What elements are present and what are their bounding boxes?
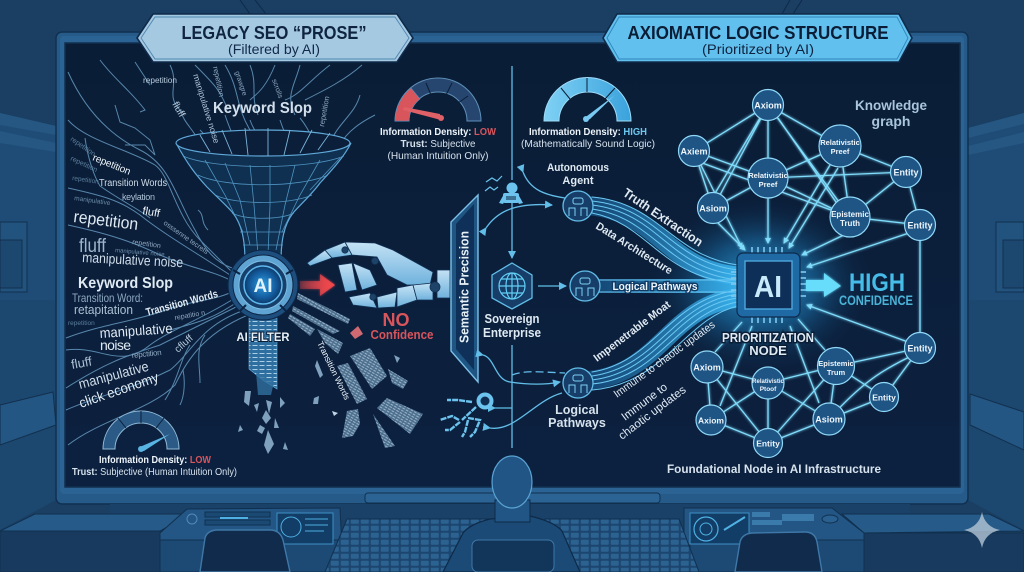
heading: legacy SEO prose <box>137 14 413 62</box>
rotated flow labels: Immune to chaotic updates <box>612 319 718 400</box>
node: entity lower right <box>904 332 936 364</box>
node: relativistic proof lower <box>752 367 785 399</box>
left word stream labels: repetition <box>91 153 132 178</box>
node: asiom bottom <box>813 403 845 435</box>
left word stream labels: noise <box>100 337 131 353</box>
label: autonomous agent: Agent <box>562 175 594 187</box>
graph nodes <box>678 90 936 458</box>
left word stream labels: manipulative <box>77 358 151 392</box>
node: relativistic preef upper: Preef <box>831 147 850 156</box>
node: epistemic truth upper <box>830 197 870 237</box>
shredded text strips <box>288 293 423 448</box>
node: entity small: Entity <box>872 392 896 402</box>
left word stream labels: click economy <box>77 369 160 411</box>
left word stream labels: fluff <box>70 354 93 372</box>
node: relativistic preef center <box>748 158 788 198</box>
node: axiom top: Axiom <box>754 100 782 110</box>
node: entity bottom <box>754 428 782 458</box>
gauge text: top low density <box>380 126 496 162</box>
heading: axiomatic logic structure: AXIOMATIC LOGIC STRUCTURE <box>628 23 888 43</box>
node: entity lower right: Entity <box>907 344 933 354</box>
node: logical pathways bottom <box>563 368 593 398</box>
knowledge graph edges bottom <box>707 319 920 443</box>
high-confidence arrow <box>806 273 841 297</box>
node: epistemic trum lower: Epistemic <box>818 359 854 368</box>
left word stream labels: repetition <box>69 155 98 174</box>
node: relativistic preef upper: Relativistic <box>820 138 860 147</box>
knowledge graph edges top <box>694 105 920 348</box>
flow bands into AI chip <box>592 197 738 390</box>
node: axiom bottom <box>696 405 726 435</box>
keyboard left <box>325 519 500 572</box>
node: relativistic preef upper <box>819 125 861 167</box>
funnel <box>176 128 351 262</box>
lower desk and consoles <box>0 504 1024 572</box>
left word stream labels: fluff <box>141 205 162 220</box>
label: logical pathways on band: Logical Pathways <box>612 281 698 293</box>
left word stream labels: Keyword Slop <box>78 275 173 292</box>
left word stream labels: manipulative noise <box>82 249 184 270</box>
label: high confidence: HIGH <box>849 269 905 297</box>
gauge text: top high density: Information Density: HIGH <box>529 126 647 138</box>
node: asiom bottom: Asiom <box>815 414 843 424</box>
AI filter core: AI <box>254 276 272 297</box>
gauge: top high density <box>544 78 631 122</box>
node: relativistic proof lower: Ptoof <box>760 386 777 393</box>
AI chip: AI <box>754 269 782 304</box>
left word stream labels: repetition <box>69 136 97 158</box>
left word stream labels: repetition <box>211 66 226 98</box>
gauge text: top low density: (Human Intuition Only) <box>388 150 488 162</box>
gauge: top low density <box>395 78 481 121</box>
left word stream labels: fluff <box>169 100 187 119</box>
left word stream labels: repetition <box>143 75 177 85</box>
icon: small agent robot top <box>485 176 523 204</box>
left word stream labels: manipulative <box>74 195 111 207</box>
label: logical pathways bottom: Logical <box>555 403 599 417</box>
left word stream labels: repetition <box>132 239 161 250</box>
red rejection arrow <box>300 274 335 296</box>
node: relativistic preef center: Relativistic <box>748 171 788 180</box>
left word stream labels: keylation <box>122 192 155 202</box>
node: epistemic truth upper: Epistemic <box>831 210 869 219</box>
rotated flow labels: Impenetrable Moat <box>592 299 673 364</box>
AI filter strip below funnel <box>238 318 288 454</box>
node: epistemic trum lower: Trum <box>827 368 845 377</box>
rotated flow labels: chaotic updates <box>617 384 689 442</box>
node: asiom upper: Asiom <box>699 204 727 214</box>
label: high confidence: CONFIDENCE <box>839 293 913 308</box>
gauge text: top low density: Trust: Subjective <box>400 138 476 150</box>
keyboard right <box>545 519 699 572</box>
left word stream labels: repetition <box>73 207 139 234</box>
heading: legacy SEO prose: LEGACY SEO “PROSE” <box>182 23 366 43</box>
node: asiom upper <box>698 192 728 224</box>
left panel: wires and word streams <box>66 60 375 445</box>
label: prioritization node: PRIORITIZATION <box>722 330 814 345</box>
gauge text: bottom-left low density: Trust: Subjective (Human Intuition Only) <box>72 466 237 478</box>
label: foundational node: Foundational Node in AI Infrastructure <box>667 462 881 476</box>
AI filter core <box>228 250 298 320</box>
label: knowledge graph: Knowledge <box>855 97 927 113</box>
gauge text: top low density: Information Density: LOW <box>380 126 496 138</box>
label: sovereign enterprise: Sovereign <box>484 311 540 326</box>
node: logical pathways middle <box>570 271 600 301</box>
node: epistemic trum lower <box>818 348 854 384</box>
central vertical flow <box>483 66 566 448</box>
left word stream labels: repetition <box>72 175 100 186</box>
left word stream labels: osssenne tecrets <box>162 220 210 256</box>
gauge: bottom-left low density <box>103 411 179 452</box>
console screen right <box>690 512 838 544</box>
label: logical pathways bottom: Pathways <box>548 416 606 430</box>
node: axiom lower: Axiom <box>693 362 721 372</box>
left word stream labels: Keyword Slop <box>213 100 312 117</box>
gauge text: bottom-left low density <box>72 454 237 478</box>
left word stream labels: Transition Word: <box>72 291 143 305</box>
star watermark <box>964 512 1000 548</box>
chair left <box>200 530 290 572</box>
NO confidence label <box>370 310 434 342</box>
left word stream labels: fluff <box>79 236 107 257</box>
node: entity small <box>870 382 898 412</box>
left word stream labels: repatitio n <box>174 310 206 322</box>
left word stream labels: grawgre <box>233 70 248 97</box>
monitor frame <box>56 32 968 504</box>
node: entity bottom: Entity <box>756 438 780 448</box>
left word stream labels: scrolls <box>270 78 284 100</box>
operator silhouette <box>443 456 580 572</box>
label: prioritization node <box>722 330 814 358</box>
left word stream labels <box>68 66 331 411</box>
left word stream labels: repctition <box>131 348 162 360</box>
node: axiem: Axiem <box>680 146 708 156</box>
chip glow <box>645 195 875 375</box>
label: high confidence <box>839 269 913 308</box>
node: axiom top <box>752 90 784 120</box>
label: sovereign enterprise: Enterprise <box>483 325 541 340</box>
node: epistemic truth upper: Truth <box>840 219 860 228</box>
heading: legacy SEO prose: (Filtered by AI) <box>228 41 320 57</box>
left word stream labels: retapitation <box>74 302 133 317</box>
label: shredded transition words: Transition Words <box>315 339 352 401</box>
NO confidence label: NO <box>382 310 410 330</box>
left word stream labels: Transition Words <box>145 288 219 319</box>
gauge text: bottom-left low density: Information Density: LOW <box>99 454 211 466</box>
node: relativistic preef center: Preef <box>759 180 778 189</box>
label: logical pathways bottom <box>548 403 606 430</box>
panel divider: semantic precision banner: Semantic Precision <box>456 231 472 343</box>
left word stream labels: repetition <box>68 320 95 327</box>
left word stream labels: Transition Words <box>99 178 167 189</box>
left word stream labels: cfluff <box>173 333 196 355</box>
rotated flow labels: Truth Extraction <box>620 185 706 250</box>
icon: sovereign enterprise globe <box>492 263 532 309</box>
label: AI filter: AI FILTER <box>236 330 290 344</box>
rotated flow labels: Data Architecture <box>593 220 674 277</box>
node: axiem <box>678 136 710 166</box>
node: entity right: Entity <box>907 220 933 230</box>
node: relativistic proof lower: Relativistic <box>752 379 785 385</box>
left word stream labels: manipulative noise <box>191 73 222 145</box>
heading: axiomatic logic structure: (Prioritized by AI) <box>702 41 814 57</box>
left word stream labels: manipulative <box>99 320 173 341</box>
robotic hand <box>307 242 450 308</box>
node: entity upper: Entity <box>893 168 919 178</box>
console screen left <box>187 512 333 544</box>
rotated flow labels <box>592 185 718 442</box>
heading: axiomatic logic structure <box>603 14 912 62</box>
left word stream labels: manipulative noise <box>115 248 166 258</box>
label: knowledge graph: graph <box>872 113 910 129</box>
label: prioritization node: NODE <box>749 343 787 358</box>
label: autonomous agent: Autonomous <box>547 162 609 174</box>
gauge text: top high density <box>521 126 655 150</box>
label: knowledge graph <box>855 97 927 129</box>
node: axiom lower <box>691 351 723 383</box>
chair right <box>735 532 822 572</box>
AI chip <box>731 247 806 323</box>
left word stream labels: repetition <box>317 95 331 127</box>
rotated flow labels: Immune to <box>620 381 670 423</box>
node: autonomous agent <box>563 191 593 221</box>
label: autonomous agent <box>547 162 609 187</box>
icon: floating robot bottom <box>440 392 494 437</box>
label: sovereign enterprise <box>483 311 541 340</box>
NO confidence label: Confidence <box>370 327 434 342</box>
node: axiom bottom: Axiom <box>698 416 724 426</box>
panel divider: semantic precision banner <box>451 195 478 382</box>
node: entity upper <box>890 156 922 188</box>
gauge text: top high density: (Mathematically Sound Logic) <box>521 138 655 150</box>
node: entity right <box>904 210 936 240</box>
